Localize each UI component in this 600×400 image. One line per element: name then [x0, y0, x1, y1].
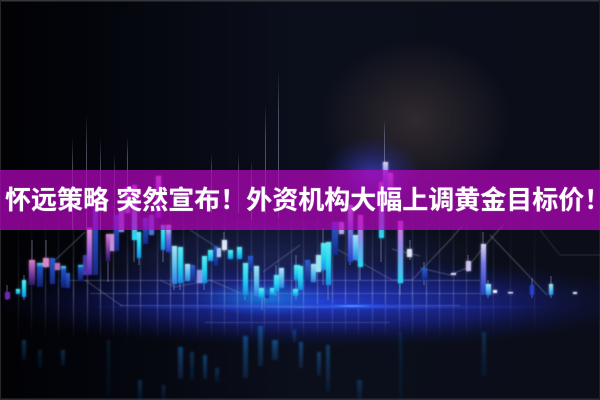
- title: 怀远策略 突然宣布！外资机构大幅上调黄金目标价！: [5, 185, 600, 215]
- glowing horizon streak: [80, 302, 560, 310]
- purple title band: [0, 170, 600, 230]
- candlestick chart: [5, 162, 577, 299]
- candlestick lower wicks: [7, 228, 551, 310]
- candlestick wicks: [72, 68, 385, 230]
- reflection of candlesticks: [22, 326, 486, 400]
- trend line: [50, 225, 600, 306]
